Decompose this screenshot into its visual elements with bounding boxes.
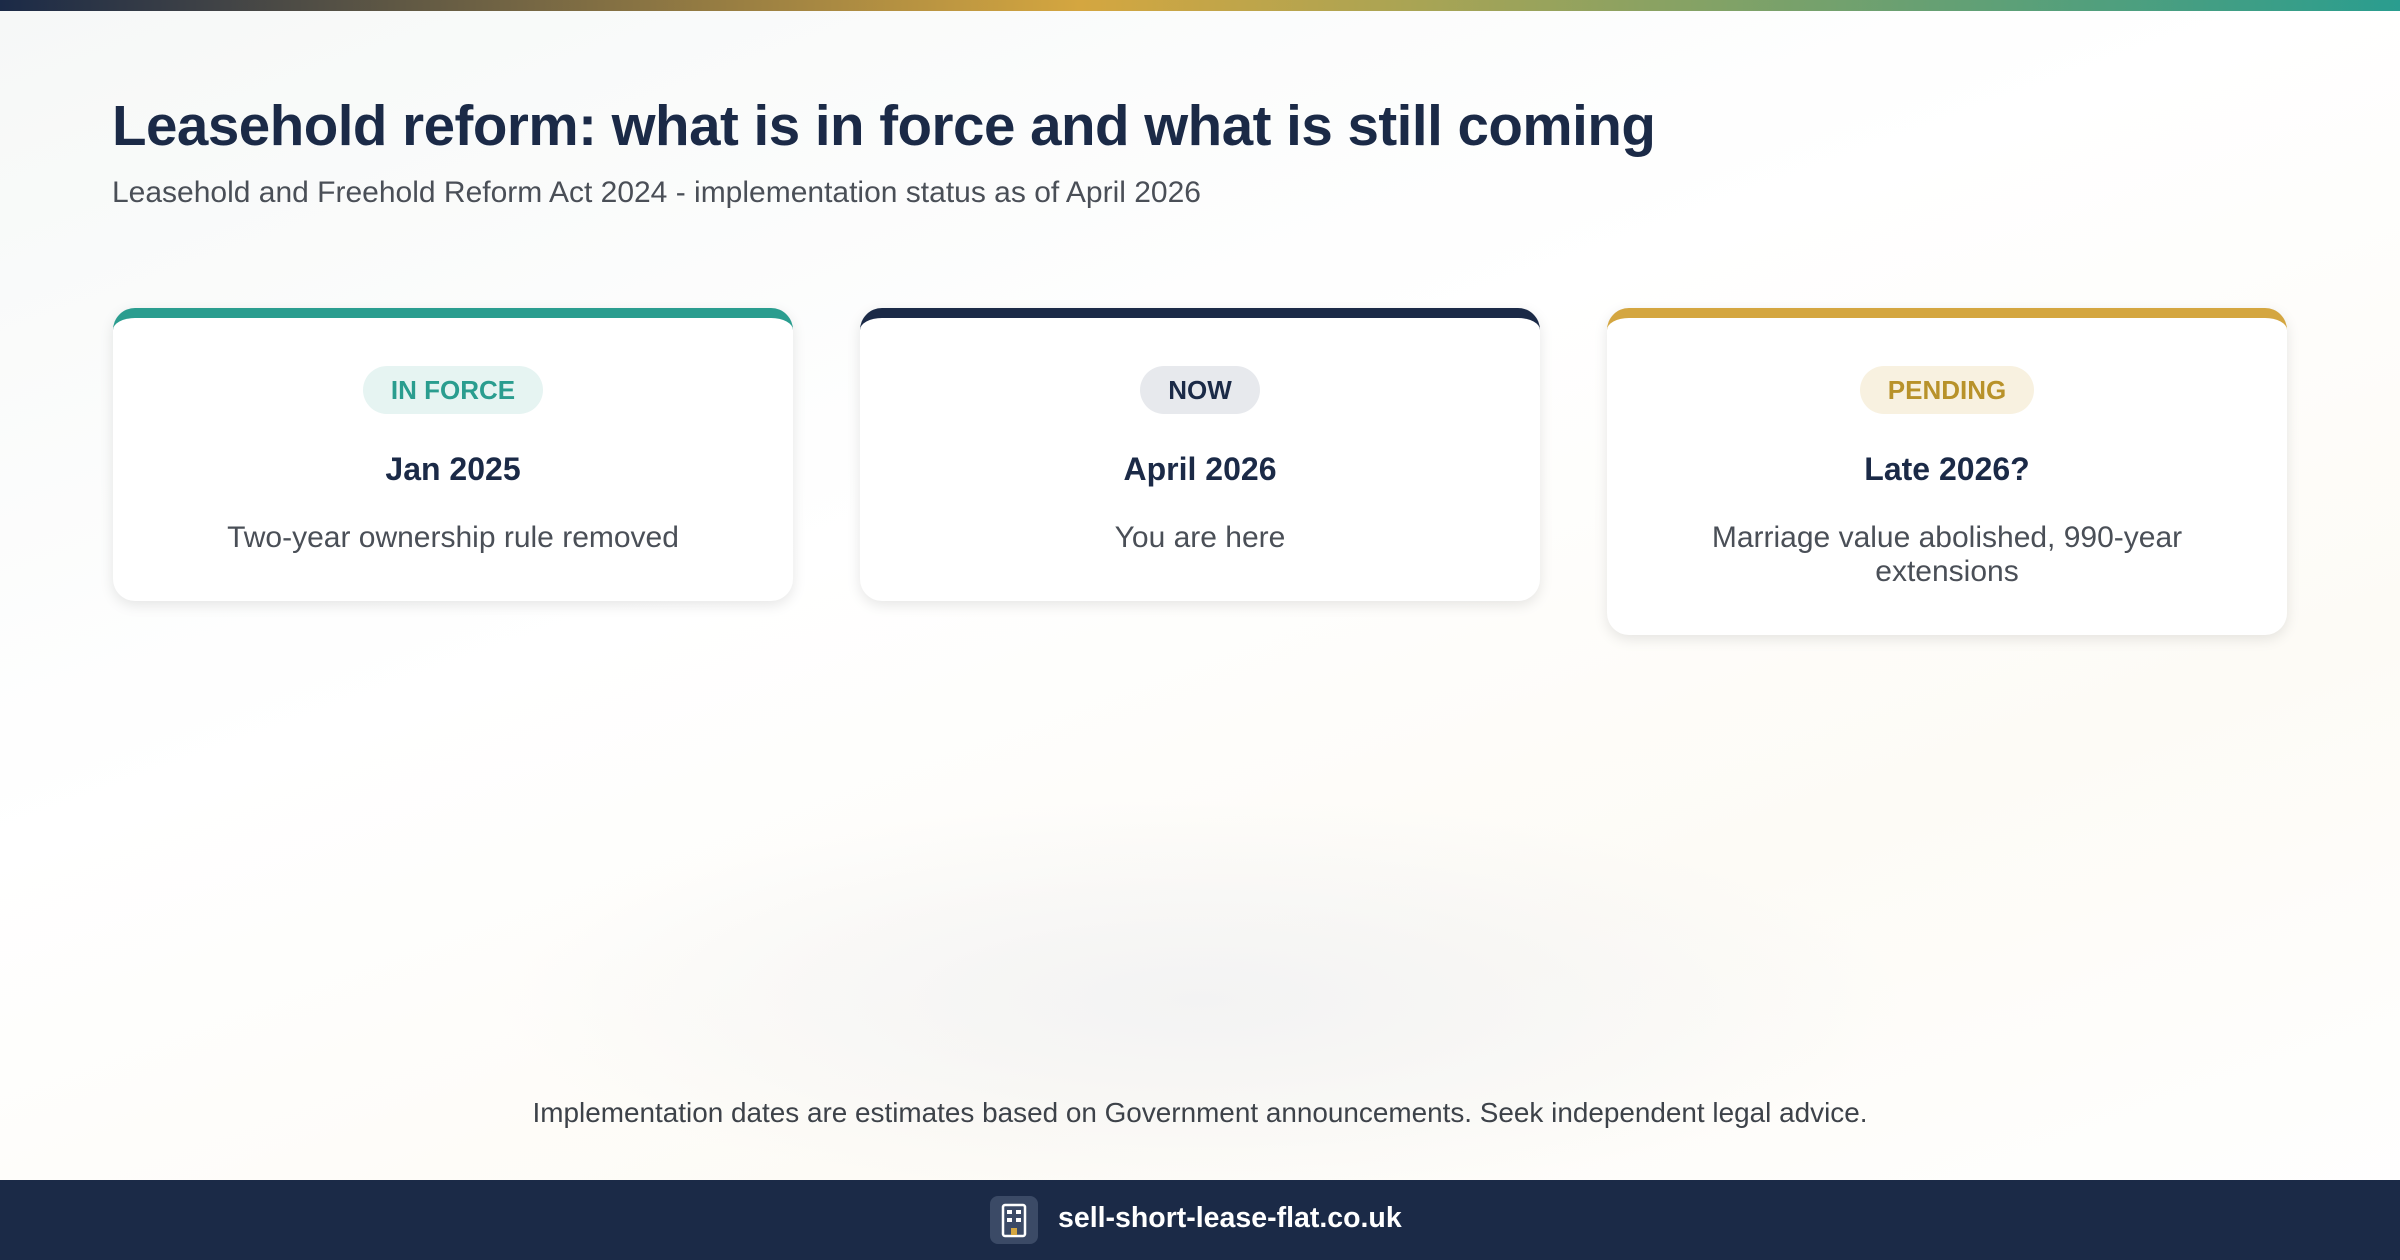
title: Leasehold reform: what is in force and what is still coming: [112, 94, 1655, 157]
top gradient bar: [0, 0, 2400, 11]
badge: now: NOW: [1168, 375, 1232, 405]
badge: in force: IN FORCE: [391, 375, 515, 405]
description: You are here: [1115, 521, 1285, 554]
badge: now: [1140, 366, 1260, 414]
panel: now: [860, 308, 1540, 601]
date: April 2026: April 2026: [1124, 451, 1276, 487]
badge: pending: [1860, 366, 2034, 414]
description: Marriage value abolished, 990-year extensions: [1712, 521, 2182, 588]
date: Late 2026?: Late 2026?: [1864, 451, 2030, 487]
footer bar: [0, 1180, 2400, 1260]
description: Two-year ownership rule removed: [227, 521, 679, 554]
footer url: sell-short-lease-flat.co.uk: [1058, 1202, 1402, 1234]
badge: pending: PENDING: [1888, 375, 2006, 405]
badge: in force: [363, 366, 543, 414]
panel: pending: [1607, 308, 2287, 635]
icon: building: [990, 1196, 1038, 1244]
footnote: Implementation dates are estimates based on Government announcements. Seek independent legal advice.: [533, 1097, 1867, 1128]
panel: in force: [113, 308, 793, 601]
subtitle: Leasehold and Freehold Reform Act 2024 - implementation status as of April 2026: [112, 176, 1201, 209]
date: Jan 2025: Jan 2025: [385, 451, 521, 487]
